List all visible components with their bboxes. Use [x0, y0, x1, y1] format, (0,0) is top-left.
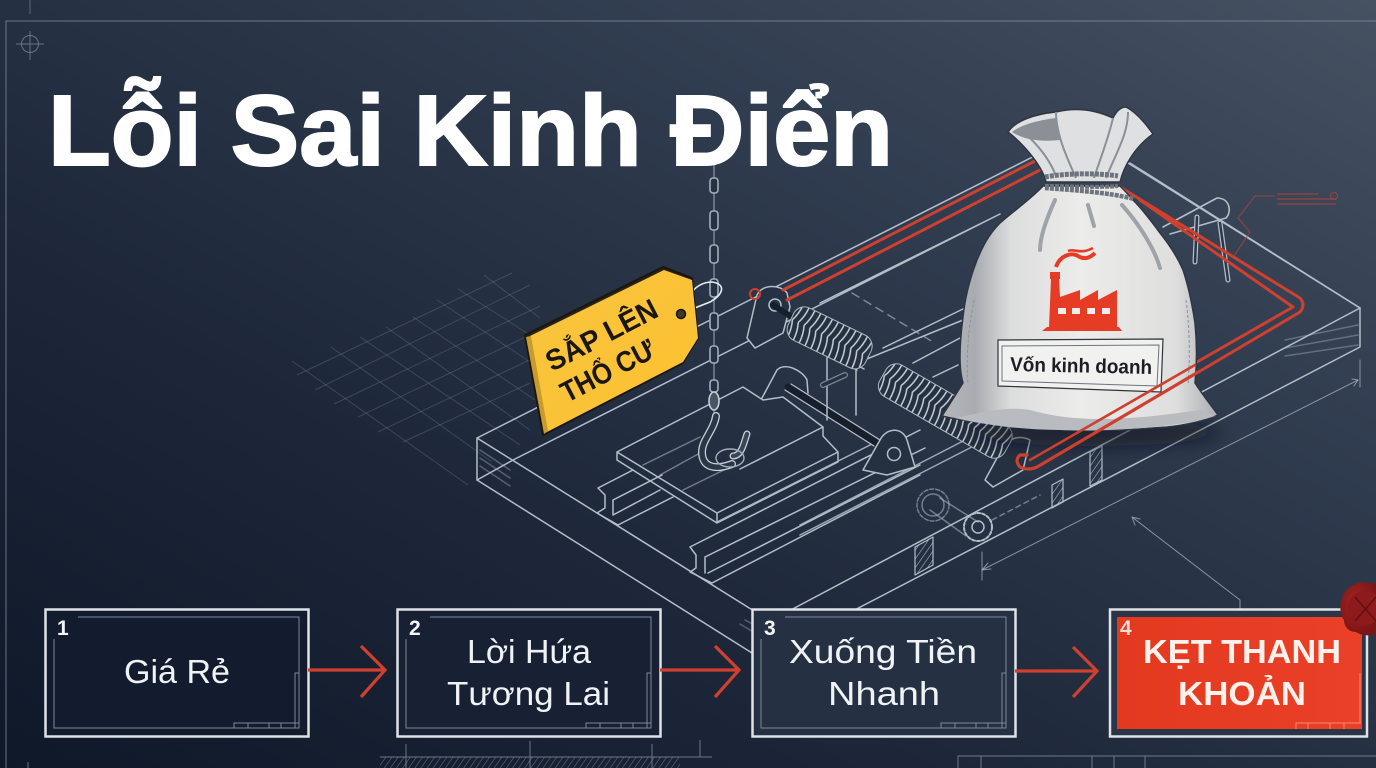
- bag shadow: [970, 418, 1220, 446]
- factory icon: [1042, 248, 1122, 331]
- coil springs: [783, 303, 1017, 463]
- arrow 1 to 2: [308, 646, 385, 697]
- money bag: [942, 107, 1220, 446]
- step 1: Giá Rẻ: [46, 610, 308, 736]
- step 2: Lời Hứa Tương Lai: Lời Hứa: [467, 633, 592, 670]
- step 4: Kẹt Thanh Khoản: 4: [1120, 617, 1132, 640]
- wax seal: [1340, 582, 1376, 635]
- step 3: Xuống Tiền Nhanh: 3: [764, 617, 776, 640]
- red callout annotation: [1234, 192, 1338, 256]
- step 3: Xuống Tiền Nhanh: Nhanh: [828, 675, 940, 712]
- chain and hook: [702, 165, 747, 467]
- bag label: Vốn kinh doanh: [1010, 354, 1152, 379]
- tag text: SẮP LÊN: [540, 292, 663, 378]
- step 2: Lời Hứa Tương Lai: [398, 610, 660, 736]
- tag string: [682, 282, 722, 313]
- bag body: [942, 186, 1218, 430]
- wing bolt: [733, 434, 747, 456]
- price tag: THỔ CƯ: [555, 332, 661, 409]
- arrow 3 to 4: [1015, 647, 1097, 697]
- bag label: [998, 339, 1163, 392]
- trap base board: [477, 133, 1360, 654]
- red spring wire: [750, 160, 1303, 377]
- arrow 2 to 3: [660, 646, 739, 697]
- step 4: Kẹt Thanh Khoản: KHOẢN: [1178, 675, 1306, 712]
- step 1: Giá Rẻ: Giá Rẻ: [124, 653, 230, 690]
- bag rope: [1045, 174, 1134, 199]
- hammer rod and brackets: [747, 286, 1030, 487]
- step 3: Xuống Tiền Nhanh: Xuống Tiền: [789, 633, 977, 670]
- dimension lines: [982, 360, 1360, 616]
- perspective grid behind the trap: [292, 273, 540, 485]
- step 1: Giá Rẻ: 1: [57, 617, 69, 640]
- gears: [917, 489, 1040, 541]
- price tag: [525, 267, 722, 435]
- step 4: Kẹt Thanh Khoản: KẸT THANH: [1143, 633, 1341, 670]
- step 4: Kẹt Thanh Khoản: [1110, 610, 1367, 736]
- title: Lỗi Sai Kinh Điển: [48, 75, 893, 187]
- bag ruffle: [1008, 107, 1153, 182]
- hatched supports: [915, 446, 1102, 575]
- step 2: Lời Hứa Tương Lai: Tương Lai: [447, 675, 610, 712]
- mousetrap blueprint: [477, 133, 1360, 654]
- red wire over the bag: [1017, 365, 1200, 469]
- back right bracket: [1163, 198, 1229, 280]
- foundation detail at bottom: [28, 740, 1376, 768]
- step 2: Lời Hứa Tương Lai: 2: [409, 617, 421, 640]
- trigger plate and rails: [597, 387, 925, 583]
- step 3: Xuống Tiền Nhanh: [752, 610, 1016, 736]
- hook: [702, 416, 732, 467]
